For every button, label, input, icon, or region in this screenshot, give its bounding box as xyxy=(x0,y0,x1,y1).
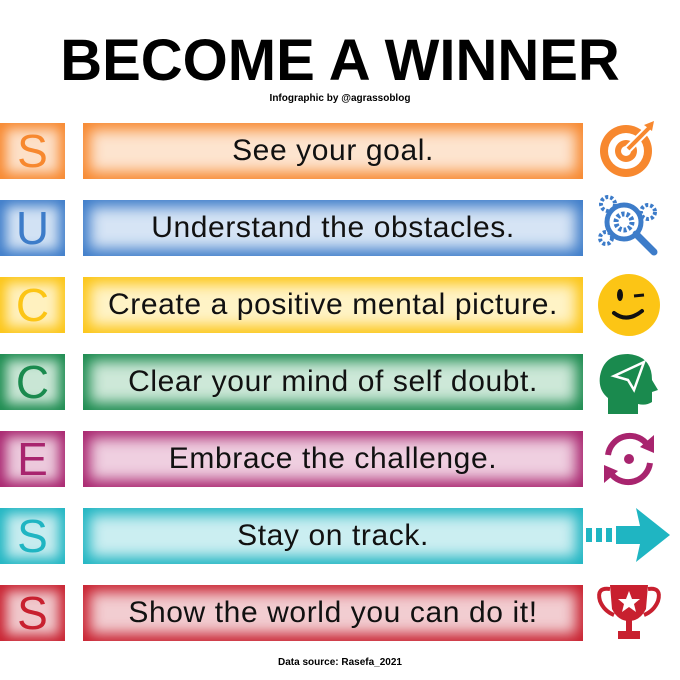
bar text: Show the world you can do it! xyxy=(128,596,538,629)
bar text: See your goal. xyxy=(232,134,434,167)
letter S xyxy=(0,585,65,641)
letter U: U xyxy=(16,202,49,254)
letter E xyxy=(0,431,65,487)
bar text xyxy=(83,200,583,256)
row C: clear mind xyxy=(0,354,658,414)
letter U xyxy=(0,200,65,256)
bar text: Clear your mind of self doubt. xyxy=(128,365,538,398)
row S: show the world xyxy=(0,585,661,641)
letter C: C xyxy=(16,279,49,331)
bar text: Stay on track. xyxy=(237,519,429,552)
icon: target xyxy=(600,121,654,177)
icon: winking smiley xyxy=(598,274,660,336)
letter C xyxy=(0,354,65,410)
letter C xyxy=(0,277,65,333)
bar text xyxy=(83,123,583,179)
bar text xyxy=(83,277,583,333)
letter S: S xyxy=(17,587,48,639)
row S: see goal xyxy=(0,121,654,179)
footer source: Data source: Rasefa_2021 xyxy=(278,657,402,668)
letter C: C xyxy=(16,356,49,408)
bar text: Embrace the challenge. xyxy=(169,442,497,475)
bar text: Understand the obstacles. xyxy=(151,211,515,244)
icon: dashed arrow xyxy=(586,508,670,562)
row C: create positive picture xyxy=(0,274,660,336)
bar text xyxy=(83,431,583,487)
letter S xyxy=(0,508,65,564)
bar text xyxy=(83,508,583,564)
bar text: Create a positive mental picture. xyxy=(108,288,558,321)
bar text xyxy=(83,354,583,410)
letter S xyxy=(0,123,65,179)
icon: trophy xyxy=(597,585,661,639)
letter E: E xyxy=(17,433,48,485)
letter S: S xyxy=(17,510,48,562)
row E: embrace challenge xyxy=(0,431,654,487)
letter S: S xyxy=(17,125,48,177)
icon: magnifier gears xyxy=(598,195,658,256)
icon: head with paper plane xyxy=(600,354,658,414)
icon: cycle arrows xyxy=(604,432,654,486)
row S: stay on track xyxy=(0,508,670,564)
bar text xyxy=(83,585,583,641)
subtitle: Infographic by @agrassoblog xyxy=(270,93,410,104)
row U: understand obstacles xyxy=(0,195,658,256)
title: BECOME A WINNER xyxy=(60,28,620,93)
